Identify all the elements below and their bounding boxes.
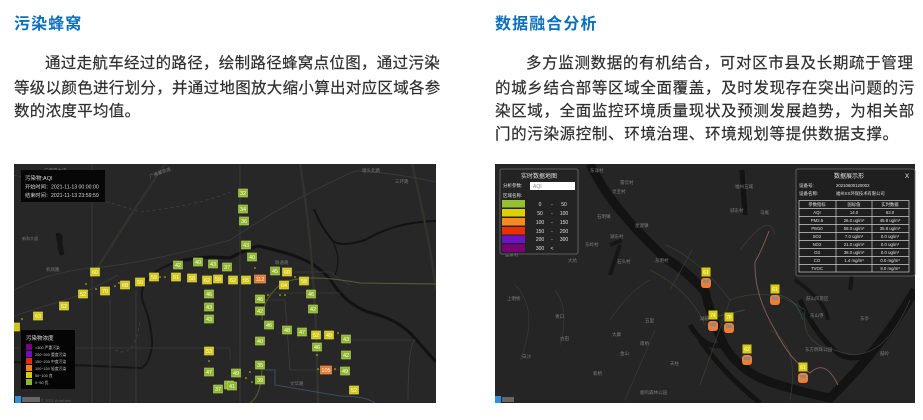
text block: 污染蜂窝 description	[14, 54, 441, 120]
honeycomb markers: 41	[229, 384, 235, 390]
place labels: 东山寺	[810, 312, 824, 319]
legend panel: realtime data map: 100	[560, 211, 568, 217]
legend panel: realtime data map: 50	[537, 211, 543, 217]
data panel: device readings table: 14.0	[850, 210, 859, 215]
road labels	[22, 165, 409, 387]
place labels: 大康	[612, 331, 621, 338]
place labels: 石明镇	[597, 213, 611, 220]
honeycomb markers: 43	[206, 305, 212, 311]
text block: 数据融合分析 description: 门的污染源控制、环境治理、环境规划等提供数据支撑。	[495, 126, 899, 143]
vehicle markers: 62	[744, 347, 750, 353]
honeycomb markers: 62	[204, 278, 210, 284]
legend panel: realtime data map: -	[551, 237, 553, 243]
place labels: 白沙	[522, 353, 531, 360]
honeycomb markers: 42	[257, 309, 263, 315]
honeycomb markers: 55	[243, 278, 249, 284]
honeycomb markers: 36	[241, 219, 247, 225]
place labels: 马尾	[760, 209, 769, 216]
legend panel: realtime data map: 50	[561, 202, 567, 208]
honeycomb markers: 48	[284, 328, 290, 334]
heading: 数据融合分析: 数据融合分析	[495, 16, 598, 33]
data panel: device readings table: 20210600120002	[836, 183, 870, 188]
vehicle markers: 74	[710, 313, 716, 319]
honeycomb markers: 37	[215, 387, 221, 393]
data panel: device readings table: 设备号:	[799, 182, 814, 189]
honeycomb markers: 40	[195, 260, 201, 266]
map logo and copyright: © 2021 AutoNavi	[41, 398, 71, 403]
data panel: device readings table: 8.0 mg/m³	[880, 266, 900, 271]
legend panel: realtime data map: -	[551, 211, 553, 217]
map: data fusion analysis	[495, 164, 915, 403]
legend: pollutant concentration: 100~150 轻度污染	[35, 366, 66, 371]
honeycomb markers: 64	[281, 283, 287, 289]
place labels: 石头村	[617, 258, 631, 265]
place labels: 孟家村	[505, 251, 519, 257]
place labels: 天柱	[670, 360, 679, 367]
data panel: device readings table: 45.8 ug/m³	[880, 218, 901, 223]
legend panel: realtime data map: 300	[560, 237, 568, 243]
road labels: 文华路	[290, 380, 304, 387]
vehicle markers: 61	[772, 287, 778, 293]
place labels: 东方明珠公园	[805, 346, 832, 353]
honeycomb markers: 46	[257, 297, 263, 303]
road labels: 新和大道	[22, 235, 38, 241]
data panel: device readings table: 设备名称:	[799, 190, 818, 197]
legend: pollutant concentration: 污染物浓度	[26, 334, 54, 342]
legend panel: realtime data map: 0	[539, 202, 542, 208]
data panel: device readings table: 35.8 ug/m³	[880, 226, 901, 231]
honeycomb markers: 34	[240, 207, 246, 213]
legend panel: realtime data map	[500, 169, 578, 254]
map: pollution honeycomb	[10, 164, 436, 403]
trail dots	[21, 267, 339, 383]
place labels: 鼓岭	[880, 350, 889, 357]
honeycomb markers: 47	[299, 330, 305, 336]
road labels: 广佛肇高速	[148, 165, 172, 180]
legend: pollutant concentration: >300 严重污染	[35, 345, 60, 350]
honeycomb markers: 50	[137, 280, 143, 286]
text block: 污染蜂窝 description: 数的浓度平均值。	[14, 103, 140, 120]
data panel: device readings table: TVOC	[811, 266, 823, 271]
honeycomb markers: 40	[249, 255, 255, 261]
data panel: device readings table: 实时数据	[881, 201, 899, 208]
honeycomb markers: 52	[351, 388, 357, 394]
legend panel: realtime data map: 区域名称:	[503, 192, 522, 199]
honeycomb markers: 63	[35, 314, 41, 320]
place labels: 东亭	[860, 315, 869, 321]
vehicle markers: 61	[703, 270, 709, 276]
place labels: 东洋村	[590, 167, 604, 174]
honeycomb markers: 43	[210, 262, 216, 268]
place labels: 新桥	[593, 370, 602, 377]
legend panel: realtime data map: 分析参数:	[503, 182, 522, 189]
place labels: 福州五城	[735, 183, 753, 190]
place labels: 灵宝村	[612, 188, 626, 195]
place labels: 洪塘	[840, 170, 849, 177]
honeycomb markers: 32	[240, 191, 246, 197]
honeycomb markers: 43	[243, 243, 249, 249]
map logo	[495, 396, 514, 403]
data panel: device readings table: 福州XX环保技术有限公司	[836, 190, 885, 197]
place labels: 雷云村	[620, 179, 634, 186]
data panel: device readings table: AQI	[813, 210, 821, 215]
honeycomb markers: 52	[61, 304, 67, 310]
honeycomb markers: 46	[206, 292, 212, 298]
road labels: 联通路	[275, 259, 289, 266]
honeycomb markers: 58	[189, 276, 195, 282]
legend panel: realtime data map: -	[551, 229, 553, 235]
honeycomb markers: 35	[257, 363, 263, 369]
legend panel: realtime data map: 150	[536, 229, 544, 235]
data panel: device readings table: 参数指标	[808, 201, 826, 208]
data panel: device readings table: 26.0 ug/m³	[844, 218, 865, 223]
place labels: 鼓山风景区	[806, 295, 829, 302]
data panel: device readings table: SO2	[813, 234, 822, 239]
honeycomb markers: 40	[257, 339, 263, 345]
place labels	[505, 167, 889, 396]
honeycomb markers: 49	[342, 369, 348, 375]
text block: 数据融合分析 description	[495, 54, 915, 143]
text block: 污染蜂窝 description: 通过走航车经过的路径，绘制路径蜂窝点位图，通过污染	[45, 55, 440, 72]
place labels: 上明桥	[507, 295, 521, 302]
honeycomb markers: 52	[313, 333, 319, 339]
text block: 数据融合分析 description: 多方监测数据的有机结合，可对区市县及长期疏于管理	[526, 55, 914, 72]
data panel: device readings table: CO	[814, 258, 821, 263]
honeycomb markers: 46	[308, 292, 314, 298]
info panel: pollutant and time range: 结束时间：2021-11-13 23:59:59	[25, 191, 99, 199]
road labels: 塘头北路	[362, 167, 380, 174]
honeycomb markers: 43	[206, 317, 212, 323]
honeycomb markers: 51	[173, 275, 179, 281]
data panel: device readings table: 0.0 ug/m³	[881, 242, 900, 247]
legend: pollutant concentration: 150~200 中度污染	[35, 359, 66, 364]
vehicle markers: 76	[726, 315, 732, 321]
legend panel: realtime data map: 150	[560, 220, 568, 226]
honeycomb markers: 42	[343, 353, 349, 359]
honeycomb markers: 46	[266, 323, 272, 329]
data panel: device readings table: 0.0 ug/m³	[881, 250, 900, 255]
legend panel: realtime data map: AQI	[533, 184, 542, 190]
data panel: device readings table: 0.0 ug/m³	[881, 234, 900, 239]
place labels: 三岐	[880, 215, 889, 222]
info panel: pollutant and time range: 污染物:AQI	[25, 174, 53, 182]
place labels: 青口	[555, 313, 564, 320]
legend panel: realtime data map: -	[551, 220, 553, 226]
honeycomb markers: 43	[343, 337, 349, 343]
data panel: device readings table: 63.0	[886, 210, 895, 215]
honeycomb markers: 60	[92, 270, 98, 276]
place labels: 金山	[620, 350, 629, 357]
info panel: pollutant and time range	[21, 170, 105, 202]
legend panel: realtime data map: 200	[536, 237, 544, 243]
honeycomb markers: 70	[102, 289, 108, 295]
data panel: device readings table: 1.4 mg/m³	[844, 258, 864, 263]
place labels: 星渡镇	[635, 222, 649, 229]
place labels: 城东村	[730, 207, 744, 214]
honeycomb markers	[10, 189, 358, 394]
legend: pollutant concentration	[21, 330, 75, 389]
legend panel: realtime data map: <	[551, 246, 554, 252]
honeycomb markers: 39	[257, 378, 263, 384]
place labels: 南桥	[640, 340, 649, 347]
data panel: device readings table: 0.0 mg/m³	[880, 258, 900, 263]
data panel: device readings table: 数据展示形	[834, 172, 864, 180]
honeycomb markers: 37	[224, 265, 230, 271]
honeycomb markers: 112	[256, 277, 264, 283]
place labels: 鹿鸣森林公园	[640, 389, 667, 396]
place labels: 湖前	[700, 315, 709, 322]
honeycomb markers: 46	[314, 345, 320, 351]
honeycomb markers: 45	[272, 269, 278, 275]
place labels: 东岭村	[585, 241, 599, 248]
honeycomb markers: 47	[206, 370, 212, 376]
legend: pollutant concentration: 200~300 重度污染	[35, 352, 66, 357]
data panel: device readings table: X	[905, 173, 910, 180]
honeycomb markers: 60	[284, 270, 290, 276]
place labels: 东明村	[655, 257, 669, 264]
text block: 污染蜂窝 description: 等级以颜色进行划分，并通过地图放大缩小算出对应区域各参	[14, 80, 441, 97]
honeycomb markers: 49	[326, 333, 332, 339]
legend panel: realtime data map: 实时数据地图	[521, 172, 557, 180]
data panel: device readings table: PM10	[811, 226, 823, 231]
vehicle markers	[701, 268, 808, 383]
honeycomb markers: 59	[151, 275, 157, 281]
data panel: device readings table: 21.0 ug/m³	[844, 242, 865, 247]
legend panel: realtime data map: 100	[536, 220, 544, 226]
data panel: device readings table: O3	[814, 250, 820, 255]
honeycomb markers: 58	[301, 279, 307, 285]
data panel: device readings table: 38.0 ug/m³	[844, 250, 865, 255]
road labels: 广佛肇大道	[44, 167, 67, 174]
honeycomb markers: 52	[80, 292, 86, 298]
legend: pollutant concentration: 50~100 良	[35, 373, 53, 378]
legend: pollutant concentration: 0~50 优	[35, 380, 49, 385]
honeycomb markers: 59	[215, 277, 221, 283]
honeycomb markers: 42	[175, 263, 181, 269]
heading: 污染蜂窝: 污染蜂窝	[14, 16, 82, 33]
honeycomb markers: 68	[122, 283, 128, 289]
legend panel: realtime data map: -	[551, 202, 553, 208]
place labels: 五里	[645, 318, 654, 323]
data panel: device readings table: 7.0 ug/m³	[845, 234, 864, 239]
honeycomb markers: 53	[206, 349, 212, 355]
honeycomb markers: 49	[233, 371, 239, 377]
text block: 数据融合分析 description: 的城乡结合部等区域全面覆盖，及时发现存在突出问题的污	[495, 80, 915, 97]
road labels: 三环路	[395, 178, 409, 185]
honeycomb markers: 62	[230, 278, 236, 284]
data panel: device readings table: 58.0 ug/m³	[844, 226, 865, 231]
data panel: device readings table: PM2.5	[811, 218, 824, 223]
road labels: 机场路	[46, 266, 60, 273]
text block: 数据融合分析 description: 染区域，全面监控环境质量现状及预测发展趋势，为相关部	[495, 103, 915, 120]
honeycomb markers: 42	[310, 307, 316, 313]
legend panel: realtime data map: 200	[560, 229, 568, 235]
place labels: 湖东村	[610, 233, 624, 240]
map logo and copyright	[15, 396, 71, 403]
honeycomb markers: 105	[321, 368, 331, 374]
place labels: 大坑	[568, 257, 577, 264]
vehicle markers: 61	[800, 365, 806, 371]
place labels: 古田	[560, 335, 569, 342]
info panel: pollutant and time range: 开始时间：2021-11-13 00:00:00	[25, 182, 99, 190]
data panel: device readings table	[796, 169, 915, 276]
data panel: device readings table: 国标值	[848, 201, 861, 208]
legend panel: realtime data map: 300	[536, 246, 544, 252]
data panel: device readings table: NO2	[813, 242, 822, 247]
